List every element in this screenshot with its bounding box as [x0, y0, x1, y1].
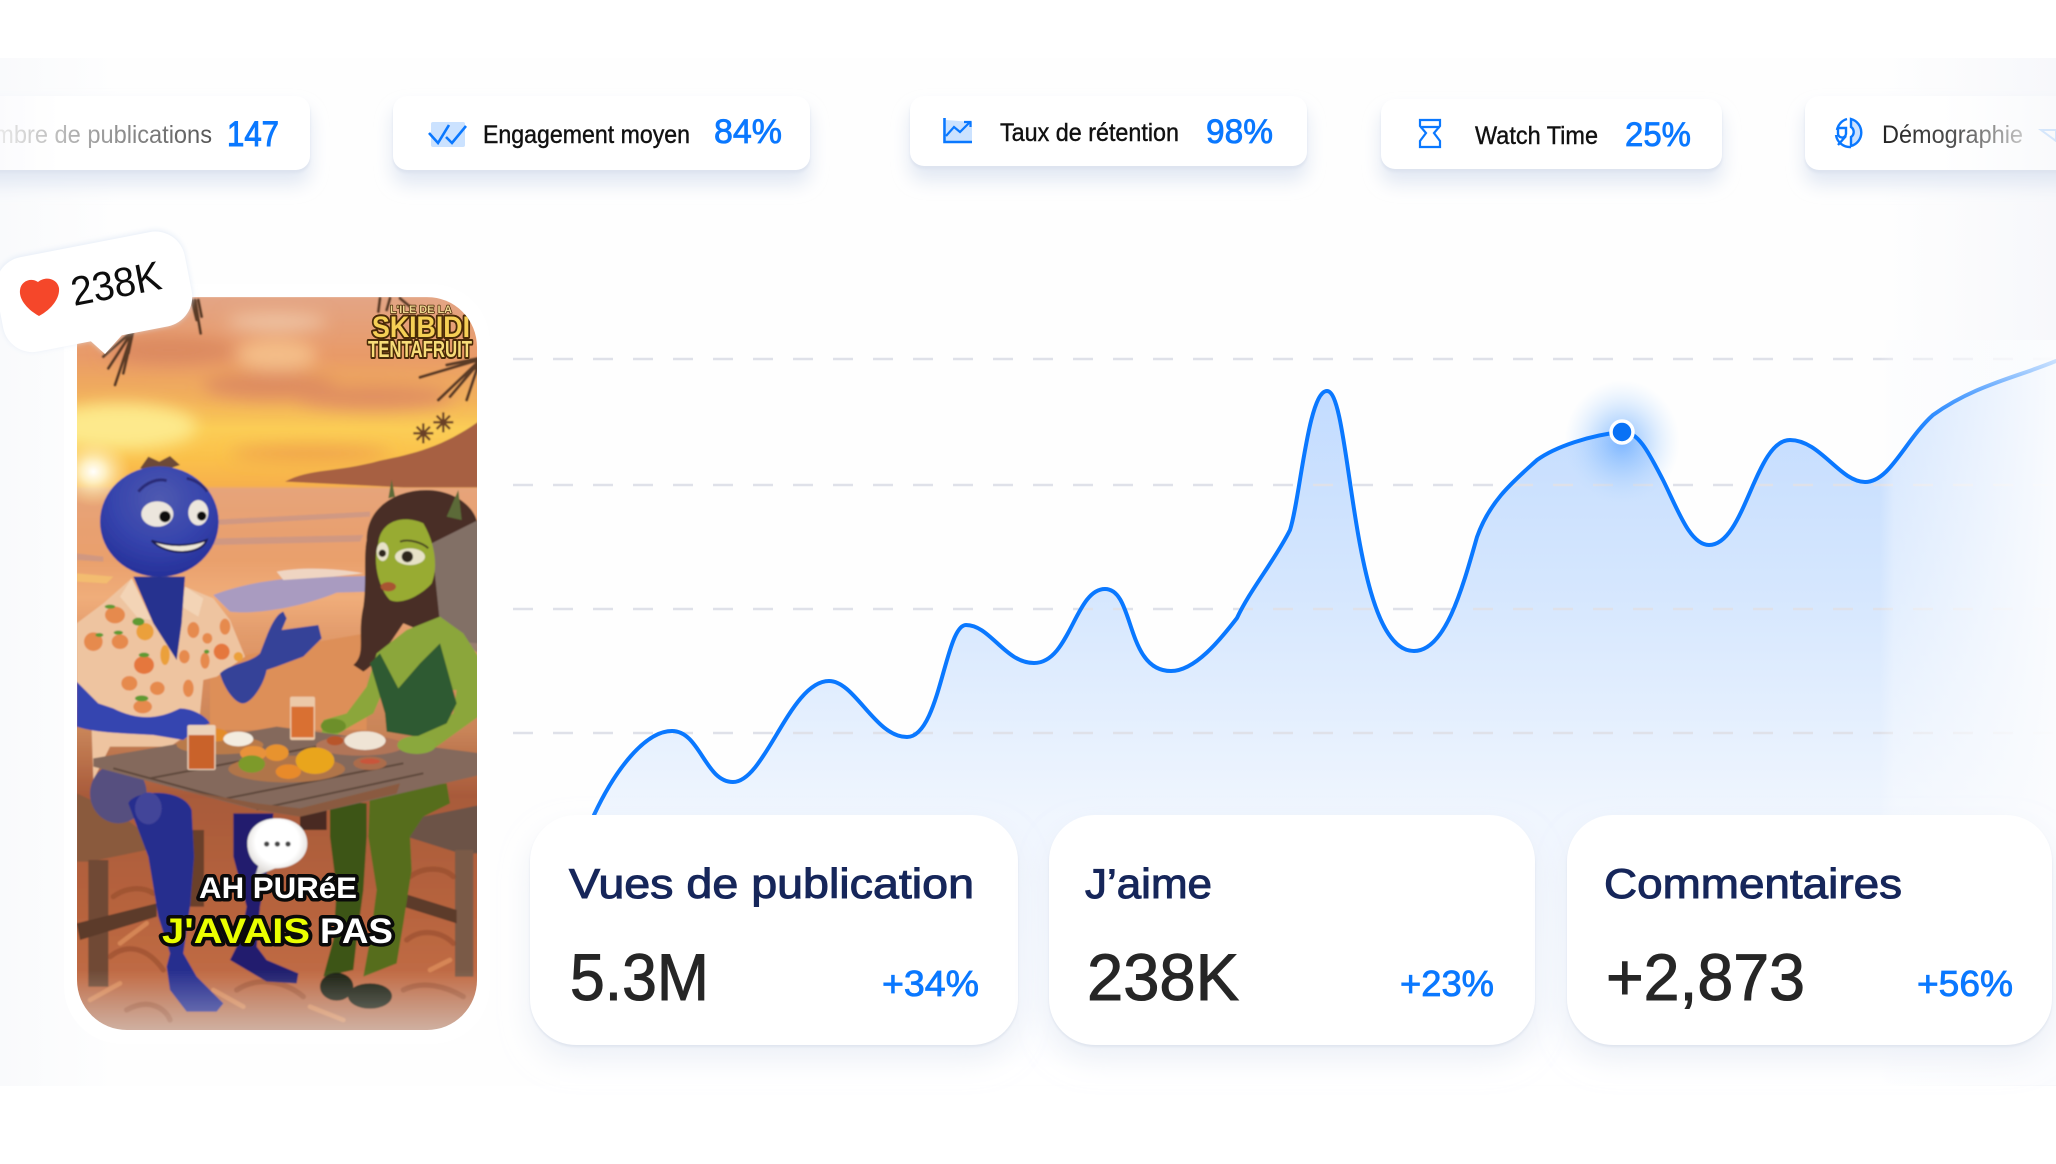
like bubble	[0, 226, 197, 357]
chat bubble	[247, 818, 307, 877]
sea streaks	[77, 512, 370, 583]
photo halo	[64, 284, 490, 1044]
pill: watch time: 25%	[1625, 116, 1691, 154]
card: j'aime: J’aime	[1085, 860, 1212, 907]
glasses	[187, 725, 216, 770]
card: vues de publication: 5.3M	[570, 940, 709, 1014]
woman body	[322, 617, 478, 755]
pill: engagement moyen	[393, 96, 810, 170]
woman shoes	[320, 973, 353, 1001]
small palms	[413, 412, 453, 443]
dot glow	[1564, 380, 1680, 504]
photo card: video thumbnail	[77, 297, 477, 1030]
icon: chevron	[2041, 130, 2056, 141]
logo: SKIBIDI	[372, 311, 470, 344]
icon: line chart	[944, 118, 972, 143]
chart right fade	[1880, 340, 2056, 1085]
pill: engagement moyen: 84%	[714, 113, 782, 151]
table	[93, 727, 480, 817]
neck	[133, 577, 185, 660]
man arms	[77, 682, 210, 740]
man shirt	[77, 578, 245, 780]
wave	[213, 576, 372, 612]
card: commentaires: +56%	[1917, 963, 2013, 1004]
logo: L'ILE DE LA	[390, 304, 452, 316]
pill: demographie: Démographie	[1882, 121, 2023, 149]
woman hair	[353, 490, 478, 672]
caption: J'AVAIS	[162, 912, 310, 951]
card: vues de publication: +34%	[882, 963, 979, 1004]
pill: taux de retention: 98%	[1206, 113, 1273, 151]
icon: heart	[20, 279, 59, 316]
icon: hourglass	[1420, 120, 1440, 147]
man head	[140, 456, 180, 472]
pill: taux de retention	[910, 96, 1307, 166]
centre plate and food	[228, 756, 345, 782]
island	[285, 422, 478, 487]
card: j'aime: +23%	[1400, 963, 1494, 1004]
pill: nombre de publications: 147	[227, 115, 279, 154]
woman legs	[323, 800, 367, 977]
right plate	[316, 736, 404, 756]
left plate	[176, 738, 264, 755]
illustration: beach scene	[43, 297, 482, 1037]
pill: engagement moyen: Engagement moyen	[483, 121, 690, 149]
logo: TENTAFRUIT	[368, 336, 472, 362]
caption	[162, 872, 393, 951]
highlighted data point	[1611, 421, 1633, 443]
caption: PAS	[320, 912, 393, 951]
bench left	[77, 793, 150, 862]
pill: watch time: Watch Time	[1475, 122, 1598, 150]
card: vues de publication: Vues de publication	[569, 860, 974, 907]
chart gridlines	[513, 359, 2056, 733]
bubble tail	[85, 325, 131, 354]
icon: pie chart	[1836, 119, 1861, 147]
card: commentaires: +2,873	[1606, 940, 1805, 1014]
sand	[210, 633, 367, 730]
logo	[368, 304, 472, 362]
bench right	[407, 805, 480, 853]
bowl	[353, 757, 387, 770]
pill: nombre de publications	[0, 96, 310, 170]
chart: engagement over time	[513, 340, 2056, 1085]
caption: AH PURéE	[199, 872, 357, 905]
man shorts	[90, 763, 147, 823]
icon: double check	[429, 122, 466, 147]
pill: taux de retention: Taux de rétention	[1000, 119, 1179, 147]
hands on table	[397, 736, 436, 754]
man far leg and foot	[230, 813, 298, 983]
chart line	[594, 361, 2056, 815]
shirt fruits	[84, 607, 243, 713]
card: j'aime	[1049, 815, 1535, 1045]
card: commentaires	[1567, 815, 2052, 1045]
pill: demographie	[1805, 96, 2056, 170]
card: vues de publication	[530, 815, 1018, 1045]
sand ripples	[110, 869, 463, 1020]
chart area fill	[560, 361, 2056, 1085]
bottom fade	[77, 972, 477, 1030]
man near leg and foot	[128, 793, 223, 1012]
card: j'aime: 238K	[1087, 940, 1239, 1014]
pill: watch time	[1381, 99, 1722, 169]
palm fronds	[103, 298, 478, 400]
sun	[77, 443, 128, 503]
card: commentaires: Commentaires	[1604, 860, 1902, 907]
clouds	[43, 313, 453, 460]
woman face	[376, 519, 435, 601]
bubble body	[0, 226, 197, 357]
like count: 238K	[67, 252, 165, 315]
